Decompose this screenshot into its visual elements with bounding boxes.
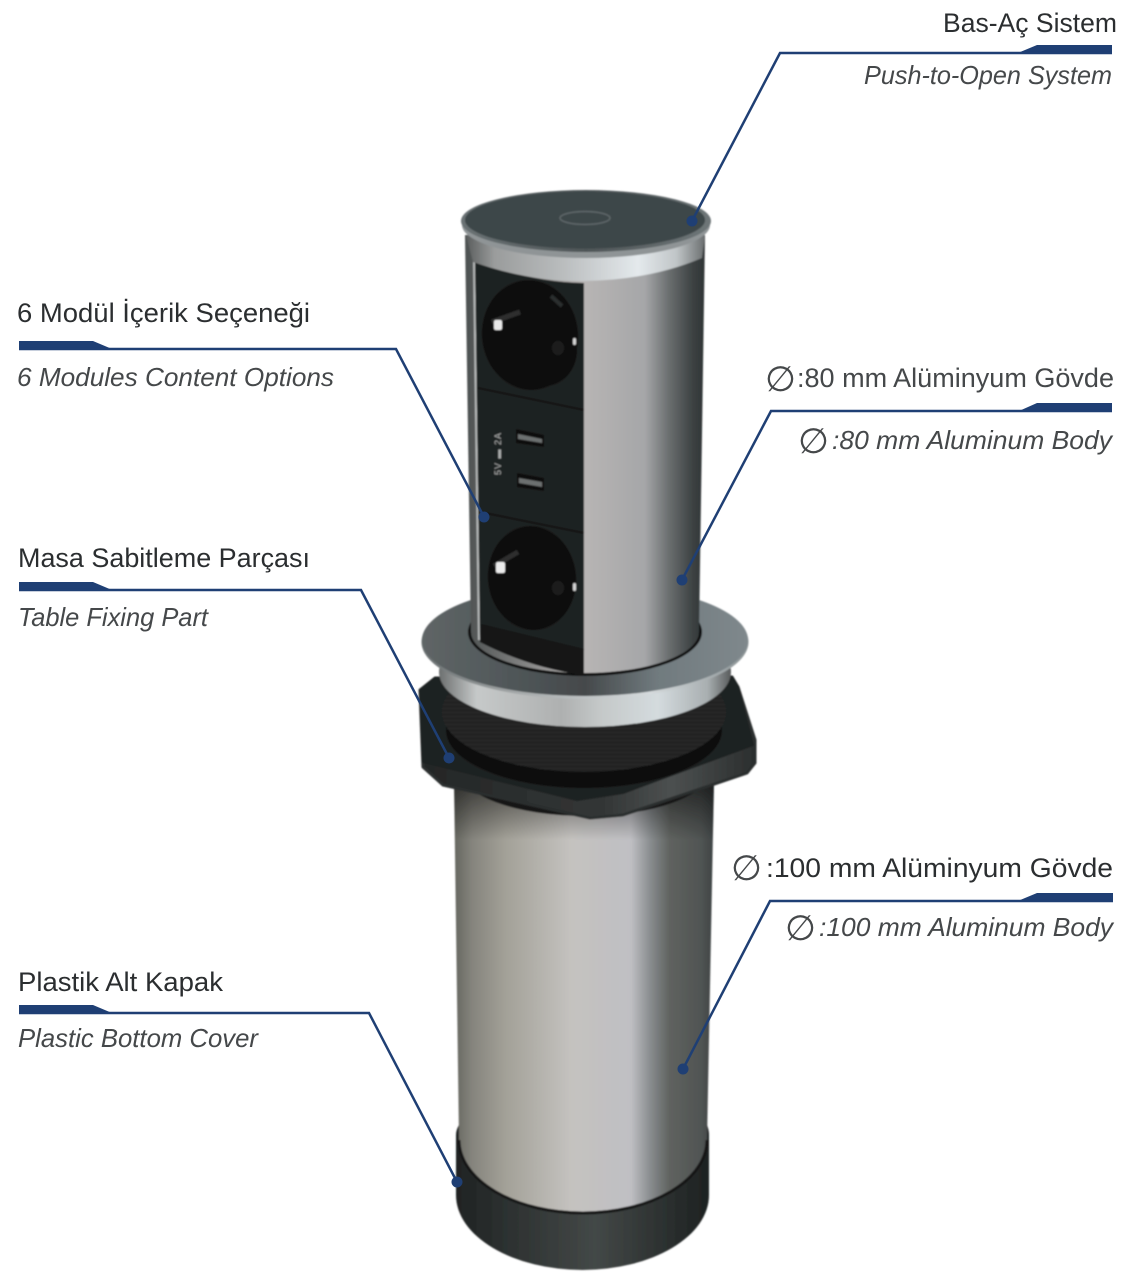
plastic bottom cover [456,1125,709,1270]
lower body top shade [454,780,714,840]
lower body seam shadow [461,1160,705,1220]
flange top face [422,584,748,696]
callout: 100 mm aluminium body: :100 mm Alüminyum Gövde [766,853,1113,883]
callout: 100 mm aluminium body [678,849,1115,1074]
plate upper surface [420,677,753,800]
collar shadow [446,672,722,788]
callout: 6 module content options [17,297,490,522]
light edge line [474,258,479,640]
silver band under cap [466,235,705,281]
callout: table fixing part [18,543,454,764]
callout: plastic bottom cover: Plastic Bottom Cover [18,1023,259,1053]
product: pop-up socket tower [420,190,755,1270]
table fixing part plate [420,677,755,818]
seam arc [459,1140,707,1213]
lower module shade [480,625,584,675]
upper schuko socket [477,275,583,395]
silver flange band [439,617,731,727]
callout: 80 mm aluminium body: :80 mm Alüminyum Gövde [797,363,1114,393]
callout: table fixing part: Masa Sabitleme Parçası [18,543,310,573]
cap rim [462,192,710,258]
callout: 80 mm aluminium body: ∅ [798,422,829,462]
gasket under fixing part [460,724,710,816]
module divider lines [478,388,584,650]
callout: plastic bottom cover: Plastik Alt Kapak [18,967,224,997]
callout: 80 mm aluminium body: ∅ [765,360,796,400]
flange hole [468,588,702,676]
callout: 6 module content options: 6 Modül İçerik Seçeneği [17,297,310,328]
callout: push-to-open system [686,8,1117,226]
black module face [475,258,584,675]
lower aluminium body 100 mm [454,780,714,1213]
lower schuko socket [483,522,581,634]
USB charging module [493,429,544,491]
callout: table fixing part: Table Fixing Part [18,602,210,632]
callout: 100 mm aluminium body: ∅ [731,849,762,889]
callout: 100 mm aluminium body: ∅ [785,909,816,949]
flange rim highlight [422,585,748,699]
callout: plastic bottom cover [18,967,462,1188]
upper aluminium body 80 mm [465,235,705,673]
cap top face [465,192,705,248]
callout: push-to-open system: Push-to-Open System [864,60,1112,90]
threaded collar [442,652,726,772]
callout: 100 mm aluminium body: :100 mm Aluminum Body [819,912,1115,942]
callout: 80 mm aluminium body: :80 mm Aluminum Body [832,425,1114,455]
callout: 80 mm aluminium body [676,360,1114,586]
cap outer ring [461,190,711,252]
push button ring [560,212,610,224]
callout: push-to-open system: Bas-Aç Sistem [943,8,1117,38]
USB charging module: 5V ▬ 2A [493,433,503,475]
callout: 6 module content options: 6 Modules Content Options [17,362,334,392]
